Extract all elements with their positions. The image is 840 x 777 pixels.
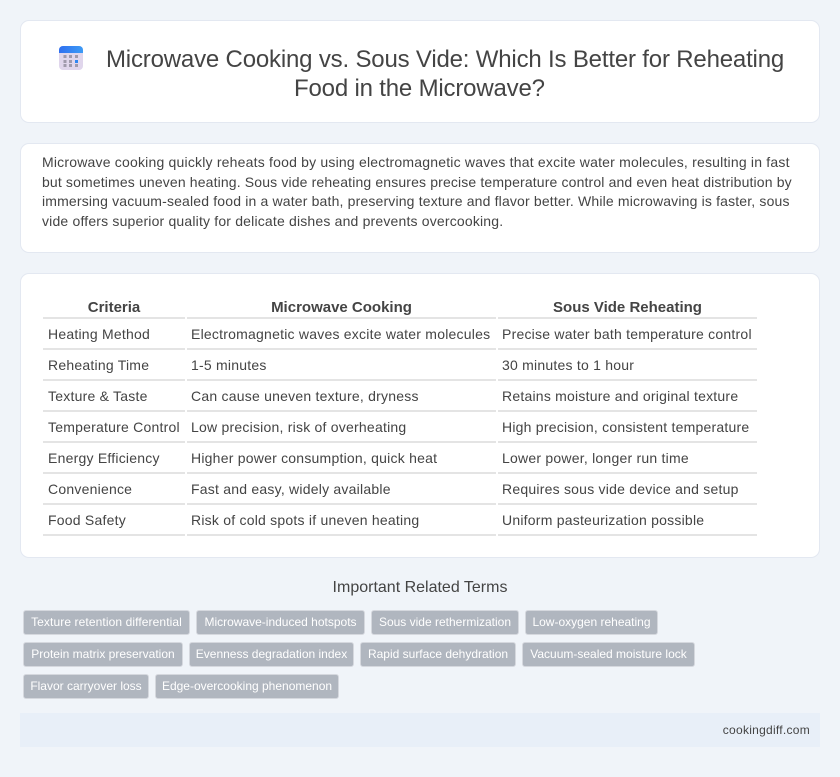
tag list: Evenness degradation index (196, 647, 347, 661)
table rows: Risk of cold spots if uneven heating (191, 512, 419, 528)
table rows: Lower power, longer run time (502, 450, 689, 466)
tag list: Protein matrix preservation (31, 647, 175, 661)
tag list: Rapid surface dehydration (368, 647, 508, 661)
table rows: Convenience (48, 481, 132, 497)
tag list: Texture retention differential (31, 615, 182, 629)
table rows: Can cause uneven texture, dryness (191, 388, 419, 404)
table rows: Low precision, risk of overheating (191, 419, 406, 435)
related terms heading: Important Related Terms (333, 579, 507, 596)
table rows: Electromagnetic waves excite water molecules (191, 326, 490, 342)
table rows: Heating Method (48, 326, 150, 342)
tag list: Microwave-induced hotspots (204, 615, 357, 629)
table rows (43, 317, 757, 536)
table rows: Uniform pasteurization possible (502, 512, 704, 528)
panel: header (20, 20, 820, 123)
intro paragraph: vide offers superior quality for delicate dishes and prevents overcooking. (42, 213, 503, 229)
table rows: 1-5 minutes (191, 357, 267, 373)
table header (88, 299, 702, 316)
intro paragraph: immersing vacuum-sealed food in a water bath, preserving texture and flavor better. While microwaving is faster, sous (42, 193, 790, 209)
table header: Microwave Cooking (271, 299, 412, 316)
table rows: Fast and easy, widely available (191, 481, 391, 497)
tag list: Low-oxygen reheating (532, 615, 651, 629)
icon: calendar grid (59, 46, 83, 70)
intro paragraph: but sometimes uneven heating. Sous vide reheating ensures precise temperature control and even heat distribution by (42, 174, 792, 190)
table rows: High precision, consistent temperature (502, 419, 749, 435)
table rows: 30 minutes to 1 hour (502, 357, 634, 373)
table rows: Higher power consumption, quick heat (191, 450, 437, 466)
title: Food in the Microwave? (294, 75, 545, 102)
table rows: Requires sous vide device and setup (502, 481, 739, 497)
title: Microwave Cooking vs. Sous Vide: Which Is Better for Reheating (106, 46, 784, 73)
table rows: Texture & Taste (48, 388, 148, 404)
tag list: Edge-overcooking phenomenon (162, 679, 332, 693)
table rows: Reheating Time (48, 357, 149, 373)
tag list: Sous vide rethermization (379, 615, 511, 629)
tag list (23, 610, 695, 699)
table header: Sous Vide Reheating (553, 299, 702, 316)
title (106, 46, 784, 102)
intro paragraph (42, 154, 792, 229)
intro paragraph: Microwave cooking quickly reheats food by using electromagnetic waves that excite water molecules, resulting in fast (42, 154, 790, 170)
tag list: Flavor carryover loss (30, 679, 142, 693)
table rows: Food Safety (48, 512, 126, 528)
table rows: Retains moisture and original texture (502, 388, 738, 404)
panel: intro text (20, 143, 820, 253)
tag list: Vacuum-sealed moisture lock (530, 647, 687, 661)
table header: Criteria (88, 299, 140, 316)
footer (20, 713, 820, 747)
table rows: Temperature Control (48, 419, 180, 435)
panel: comparison table (20, 273, 820, 558)
table rows: Precise water bath temperature control (502, 326, 752, 342)
footer source: cookingdiff.com (723, 723, 810, 737)
table rows: Energy Efficiency (48, 450, 160, 466)
